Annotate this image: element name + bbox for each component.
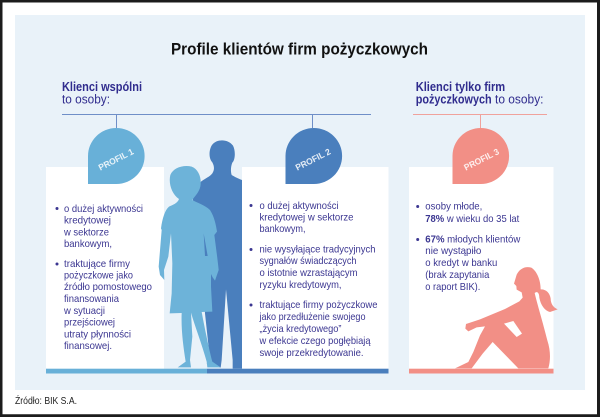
text: profile 3 bullets: 78% w wieku do 35 lat <box>425 214 519 225</box>
badge: profile 3: PROFIL 3 <box>462 146 501 173</box>
text: profile 2 bullets: sygnałów świadczących <box>260 256 357 267</box>
icon: woman silhouette <box>159 166 221 367</box>
text: profile 1 bullets: przejściowej <box>64 318 115 329</box>
badge: profile 1: PROFIL 1 <box>97 146 135 173</box>
text: profile 1 bullets <box>56 204 152 352</box>
text: profile 1 bullets: finansowej. <box>64 341 112 352</box>
panel: profile 2 card <box>242 167 388 369</box>
text: profile 1 bullets: utraty płynności <box>64 329 131 340</box>
panel: profile 3 card <box>409 167 554 369</box>
text: profile 3 bullets: 67% młodych klientów <box>425 234 521 246</box>
text: profile 1 bullets: finansowania <box>64 294 119 305</box>
text: profile 3 bullets <box>416 202 521 293</box>
base bar: profile 3 <box>409 369 554 374</box>
heading: loan-firm-only clients: to osoby: <box>495 92 544 106</box>
connector: loan-firm-only clients <box>413 114 547 128</box>
text: profile 1 bullets: kredytowej <box>64 216 111 226</box>
text: profile 3 bullets: (brak zapytania <box>425 270 489 281</box>
heading: loan-firm-only clients <box>416 80 544 106</box>
text: profile 3 bullets: o raport BIK). <box>425 282 480 293</box>
connector: shared clients <box>62 114 371 128</box>
heading: loan-firm-only clients: pożyczkowych <box>416 92 492 106</box>
text: profile 2 bullets: o istotnie wzrastającym <box>260 268 358 279</box>
text: profile 1 bullets: o dużej aktywności <box>64 204 143 215</box>
text: profile 2 bullets: bankowym, <box>260 224 306 235</box>
text: profile 2 bullets: traktujące firmy pożyczkowe <box>260 300 378 311</box>
heading: shared clients: Klienci wspólni <box>62 80 142 94</box>
heading: loan-firm-only clients: Klienci tylko firm <box>416 80 505 94</box>
text: profile 1 bullets: w sytuacji <box>63 306 105 317</box>
icon: seated girl silhouette <box>455 267 558 368</box>
text: profile 2 bullets: nie wysyłające tradycyjnych <box>260 244 376 256</box>
text: profile 1 bullets: źródło pomostowego <box>64 282 152 293</box>
badge: profile 2: PROFIL 2 <box>294 146 332 173</box>
badge: profile 2 <box>286 128 342 184</box>
text: profile 2 bullets: kredytowej w sektorze <box>260 212 354 224</box>
title: Profile klientów firm pożyczkowych <box>171 40 428 58</box>
text: profile 2 bullets: swoje przekredytowanie. <box>260 348 364 359</box>
panel: profile 1 card <box>46 167 164 369</box>
badge: profile 1 <box>88 128 145 184</box>
text: profile 1 bullets: pożyczkowe jako <box>64 270 133 282</box>
base bar: profile 1 <box>46 369 207 374</box>
source note: Źródło: BIK S.A. <box>15 394 77 407</box>
text: profile 1 bullets: w sektorze <box>63 228 109 238</box>
heading: shared clients: to osoby: <box>62 92 110 106</box>
text: profile 2 bullets: o dużej aktywności <box>260 201 338 212</box>
text: profile 2 bullets: jako przedłużenie swojego <box>259 312 366 323</box>
text: profile 3 bullets: osoby młode, <box>425 202 482 213</box>
text: profile 2 bullets <box>250 201 378 359</box>
text: profile 3 bullets: o kredyt w banku <box>425 258 497 269</box>
icon: man silhouette <box>192 140 242 369</box>
text: profile 2 bullets: w efekcie czego pogłębiają <box>259 336 371 347</box>
base bar: profile 2 <box>207 369 388 374</box>
badge: profile 3 <box>452 128 509 184</box>
text: profile 2 bullets: ryzyku kredytowym, <box>260 280 342 291</box>
text: profile 1 bullets: traktujące firmy <box>64 259 131 270</box>
text: profile 1 bullets: bankowym, <box>64 239 112 250</box>
text: profile 2 bullets: „życia kredytowego” <box>260 324 342 335</box>
heading: shared clients <box>62 80 142 106</box>
text: profile 3 bullets: nie wystąpiło <box>425 246 481 257</box>
